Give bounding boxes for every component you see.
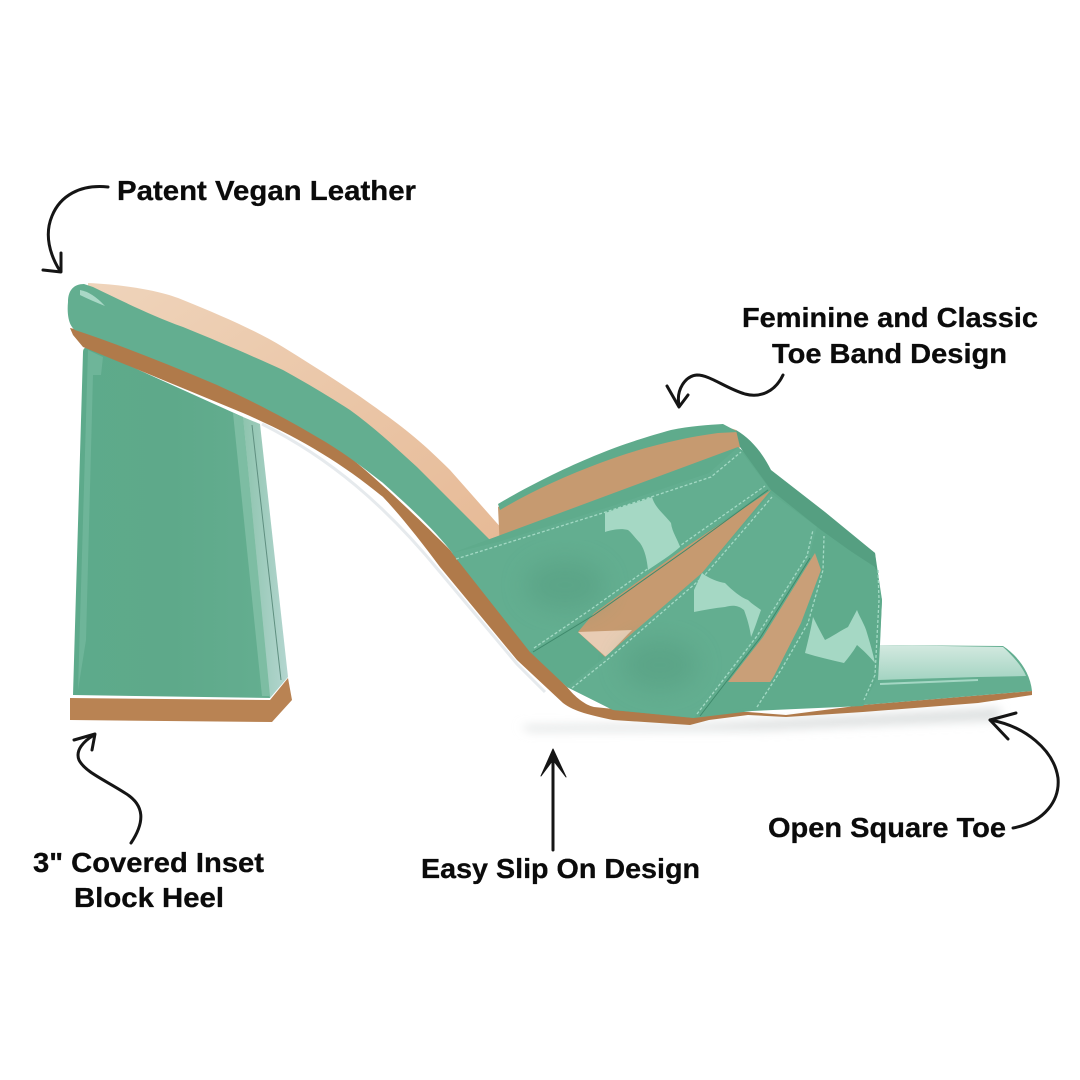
arrow: to block heel xyxy=(74,734,141,843)
arrow: to heel seat xyxy=(43,187,108,272)
arrow: to toe xyxy=(990,713,1058,828)
sole band xyxy=(68,284,495,556)
label: 3" Covered Inset Block Heel xyxy=(33,847,264,913)
strap 2 gloss xyxy=(694,573,761,637)
label: Easy Slip On Design: Easy Slip On Design xyxy=(421,853,700,884)
arrow: to sole xyxy=(541,749,566,850)
label: Feminine and Classic Toe Band Design: Toe Band Design xyxy=(772,338,1007,369)
tan welt xyxy=(70,328,1032,725)
open square toe xyxy=(863,645,1032,705)
strap 3 gloss xyxy=(805,610,875,663)
arrow: to toe band xyxy=(667,375,783,407)
label: Patent Vegan Leather: Patent Vegan Leather xyxy=(117,175,416,206)
inner lower straps xyxy=(538,637,603,678)
label: Feminine and Classic Toe Band Design xyxy=(742,302,1038,369)
label: Open Square Toe: Open Square Toe xyxy=(768,812,1006,843)
strap 2 xyxy=(567,493,817,718)
label: Feminine and Classic Toe Band Design: Feminine and Classic xyxy=(742,302,1038,333)
lining visible in cutouts xyxy=(578,490,771,657)
heel seat highlight xyxy=(80,290,105,306)
sheen under welt xyxy=(262,424,545,692)
label: 3" Covered Inset Block Heel: Block Heel xyxy=(74,882,224,913)
strap 1 xyxy=(452,447,769,652)
ground shadow xyxy=(520,708,1000,731)
strap 1 gloss xyxy=(605,497,680,570)
top band and lining xyxy=(498,424,745,550)
label: 3" Covered Inset Block Heel: 3" Covered Inset xyxy=(33,847,264,878)
block heel xyxy=(70,348,292,722)
shoe xyxy=(68,283,1032,731)
strap 3 xyxy=(752,532,882,710)
strap base xyxy=(452,447,882,718)
footbed xyxy=(88,283,505,560)
rear diagonal band xyxy=(736,430,877,570)
